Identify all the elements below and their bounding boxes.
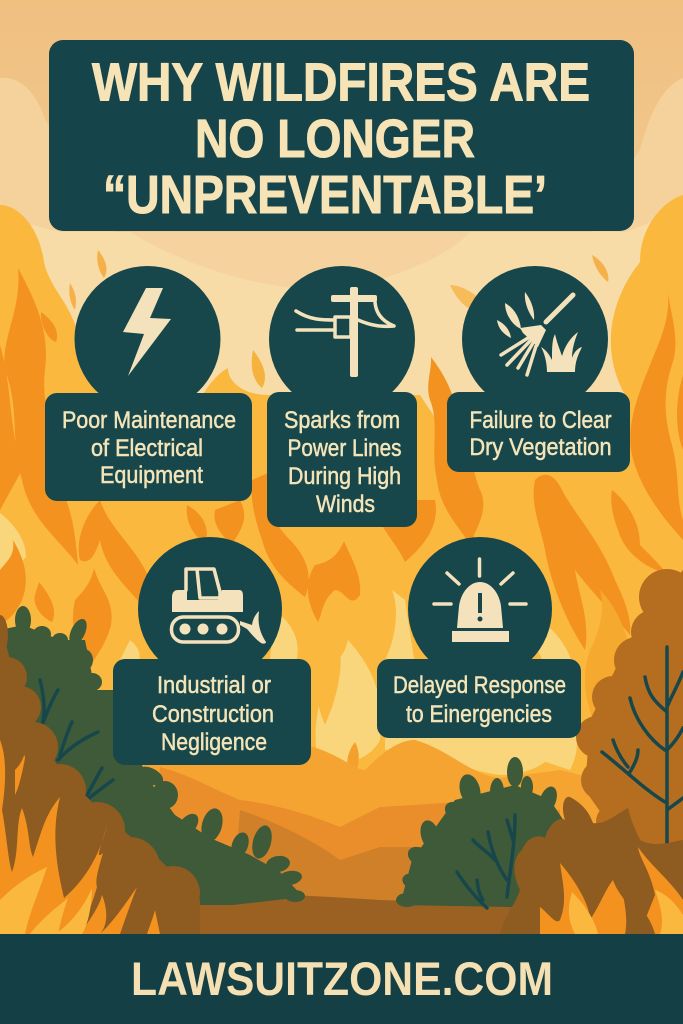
footer band — [0, 934, 683, 1024]
icon: bulldozer — [172, 569, 266, 644]
title text: NO LONGER — [195, 109, 475, 169]
label: Power Lines — [288, 435, 402, 462]
bush: left brown — [0, 615, 200, 934]
title box — [49, 40, 634, 231]
footer text: LAWSUITZONE.COM — [131, 952, 553, 1005]
bush: left green — [0, 606, 305, 905]
background: sky and clouds — [0, 0, 683, 420]
title text: WHY WILDFIRES ARE — [92, 52, 590, 112]
label: Failure to Clear — [470, 407, 612, 434]
icon: power pole — [296, 287, 394, 377]
panel: sparks from power lines — [267, 266, 417, 527]
icon: lightning bolt — [123, 288, 171, 376]
icon: siren — [434, 559, 526, 642]
tree: right — [576, 569, 683, 860]
bush: right brown with flames — [500, 797, 683, 934]
label: Construction — [152, 701, 274, 728]
panel: delayed response — [377, 537, 581, 738]
label: of Electrical — [91, 435, 203, 462]
fire: yellow flame mass — [0, 195, 683, 934]
label: Dry Vegetation — [470, 434, 612, 461]
fire: pale flame highlights — [0, 513, 577, 775]
icon: rake and grass — [497, 292, 582, 375]
fire: orange flames — [0, 268, 683, 780]
label: Equipment — [100, 462, 203, 489]
label: Poor Maintenance — [62, 407, 236, 434]
bush: right green — [396, 757, 590, 908]
title text: “UNPREVENTABLE’ — [103, 165, 547, 225]
hills — [0, 740, 683, 934]
panel: industrial negligence — [113, 537, 311, 765]
label: Negligence — [161, 729, 267, 756]
label: Industrial or — [157, 672, 271, 699]
small floating embers — [69, 250, 608, 388]
label: Winds — [316, 491, 375, 518]
label: Delayed Response — [393, 672, 566, 699]
label: to Einergencies — [406, 701, 552, 728]
label: Sparks from — [284, 407, 400, 434]
label: During High — [288, 463, 401, 490]
panel: failure to clear vegetation — [447, 266, 630, 472]
flames: lower left foreground — [0, 740, 160, 934]
panel: poor maintenance — [45, 266, 252, 501]
